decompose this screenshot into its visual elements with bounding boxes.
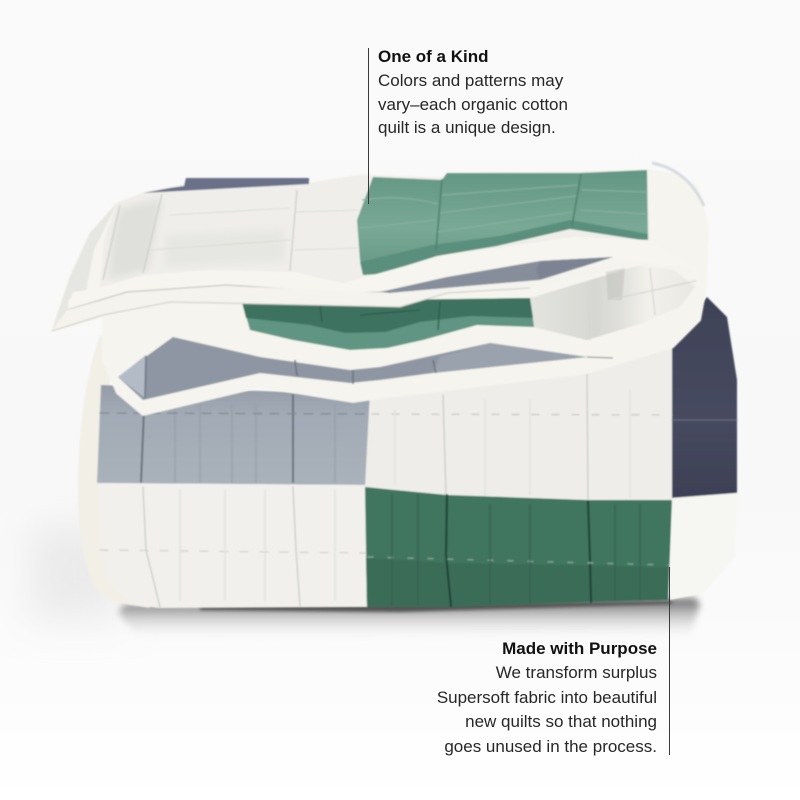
leader line: Made with Purpose bbox=[669, 567, 670, 755]
cream left edge bbox=[78, 335, 150, 608]
corner grey flash bbox=[652, 163, 704, 206]
white patch lower left bbox=[97, 483, 370, 608]
grey under-flap lining bbox=[380, 257, 613, 293]
floor shadow bbox=[118, 598, 700, 640]
callout: One of a Kind: vary–each organic cotton bbox=[378, 95, 568, 114]
top green patch bbox=[357, 170, 648, 275]
top flap quilted surface bbox=[100, 170, 650, 288]
callout: Made with Purpose bbox=[437, 639, 657, 756]
second flap band bbox=[52, 262, 700, 330]
callout: One of a Kind bbox=[378, 47, 568, 137]
lower quilt body bbox=[78, 297, 737, 608]
white patch right end bbox=[670, 493, 737, 600]
callout: Made with Purpose: Supersoft fabric into beautiful bbox=[437, 688, 657, 707]
outer left corner bbox=[52, 203, 117, 330]
callout: One of a Kind: quilt is a unique design. bbox=[378, 118, 556, 137]
navy strip bbox=[143, 178, 309, 193]
callout: Made with Purpose: new quilts so that nothing bbox=[465, 712, 657, 731]
fold silhouette bbox=[52, 163, 708, 415]
leader line: One of a Kind bbox=[368, 48, 369, 204]
quilting seams bbox=[100, 372, 737, 607]
callout: One of a Kind: Colors and patterns may bbox=[378, 71, 563, 90]
grey patch bbox=[97, 385, 370, 485]
lower grey lining bbox=[118, 337, 587, 400]
top flap binding bbox=[67, 237, 704, 310]
callout: Made with Purpose: Made with Purpose bbox=[502, 639, 657, 658]
green patch bbox=[365, 487, 672, 607]
lower green band bbox=[242, 298, 534, 350]
inner right panel bbox=[530, 263, 695, 340]
callout: Made with Purpose: goes unused in the process. bbox=[444, 737, 657, 756]
navy patch bbox=[672, 297, 737, 498]
white patch upper right bbox=[365, 335, 672, 500]
callout: One of a Kind: One of a Kind bbox=[378, 47, 488, 66]
soft shadow left of the quilt bbox=[30, 525, 120, 620]
left grey shading on flap bbox=[108, 198, 162, 280]
callout: Made with Purpose: We transform surplus bbox=[496, 663, 657, 682]
